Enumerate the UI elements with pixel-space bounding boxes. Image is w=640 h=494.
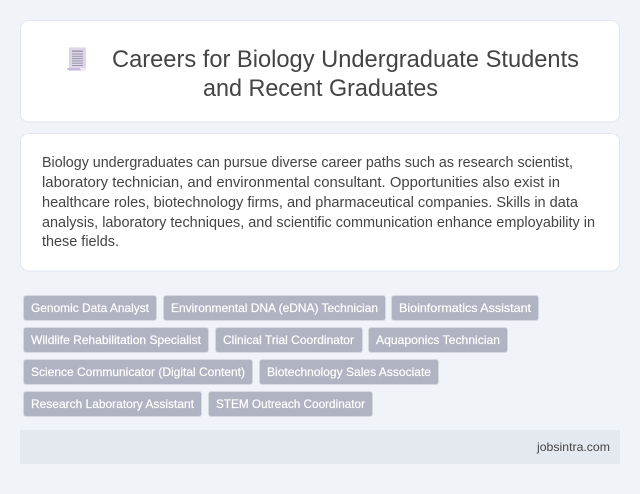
text block: description bbox=[42, 155, 595, 250]
tag bbox=[24, 296, 156, 320]
icon: document scroll bbox=[67, 47, 86, 71]
title: and Recent Graduates bbox=[203, 75, 438, 102]
tag bbox=[216, 328, 362, 352]
tag: Wildlife Rehabilitation Specialist bbox=[31, 333, 202, 347]
tag bbox=[24, 360, 252, 384]
footer bbox=[20, 430, 620, 464]
text block: description: Biology undergraduates can pursue diverse career paths such as research scientist, bbox=[42, 155, 573, 171]
text block: description: healthcare roles, biotechnology firms, and pharmaceutical companies. Skills in data bbox=[42, 195, 578, 211]
tag bbox=[260, 360, 438, 384]
tag: Environmental DNA (eDNA) Technician bbox=[171, 301, 378, 315]
title bbox=[112, 46, 579, 102]
panel: description bbox=[20, 134, 620, 271]
title: Careers for Biology Undergraduate Students bbox=[112, 46, 579, 73]
tag: STEM Outreach Coordinator bbox=[216, 397, 365, 411]
tag: Aquaponics Technician bbox=[376, 333, 500, 347]
tag bbox=[392, 296, 538, 320]
text block: description: these fields. bbox=[42, 234, 119, 250]
tag: Clinical Trial Coordinator bbox=[223, 333, 354, 347]
tag bbox=[208, 392, 372, 416]
panel: title card bbox=[20, 20, 620, 122]
tag list: related careers bbox=[24, 296, 538, 416]
tag: Research Laboratory Assistant bbox=[31, 397, 195, 411]
text block: description: laboratory technician, and environmental consultant. Opportunities also exist in bbox=[42, 175, 560, 191]
tag: Science Communicator (Digital Content) bbox=[31, 365, 245, 379]
footer source: jobsintra.com bbox=[536, 440, 610, 454]
tag bbox=[24, 328, 208, 352]
tag: Genomic Data Analyst bbox=[31, 301, 150, 315]
text block: description: analysis, laboratory techniques, and scientific communication enhance employability in bbox=[42, 215, 595, 231]
tag: Bioinformatics Assistant bbox=[399, 301, 532, 315]
tag bbox=[164, 296, 386, 320]
tag bbox=[24, 392, 202, 416]
tag bbox=[368, 328, 508, 352]
tag: Biotechnology Sales Associate bbox=[267, 365, 431, 379]
